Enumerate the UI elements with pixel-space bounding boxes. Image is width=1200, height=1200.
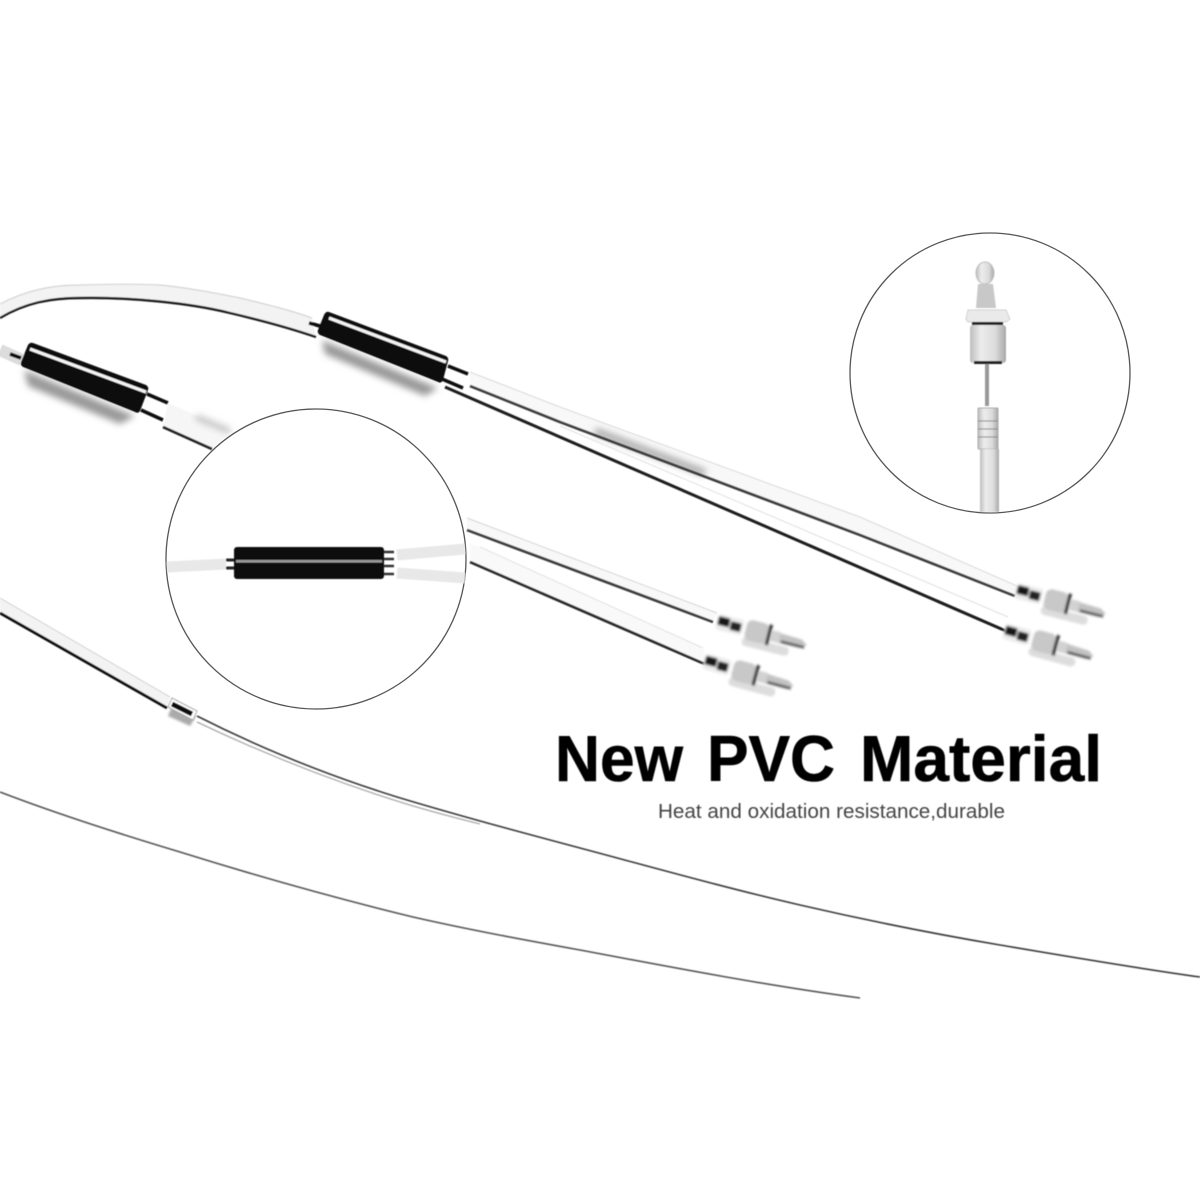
cable set: lower cable and wires	[0, 598, 1200, 998]
black washer	[972, 322, 1003, 325]
lower housing	[0, 598, 170, 708]
upper housing curve	[0, 284, 316, 337]
nut flange	[966, 310, 1010, 322]
bottom wire	[0, 792, 860, 998]
inner wire shadow line	[197, 722, 480, 824]
thin cable left	[167, 564, 226, 567]
heading	[555, 722, 1102, 795]
twin cables right	[397, 549, 465, 578]
upper long cable 1	[470, 372, 1017, 596]
mid cable 1	[467, 518, 717, 622]
cable set: second pair	[0, 343, 809, 702]
connector pins left	[226, 560, 234, 568]
connector pins right	[384, 552, 394, 574]
left black sleeve shadow	[24, 370, 135, 424]
left black sleeve	[10, 343, 168, 420]
heading: PVC	[707, 722, 835, 795]
sleeve highlight	[236, 560, 382, 563]
lower crimp	[168, 698, 197, 726]
upper black sleeve shadow	[322, 340, 438, 396]
thread	[976, 284, 996, 308]
housing	[980, 449, 999, 512]
black sleeve	[234, 547, 384, 579]
ball tip	[976, 262, 994, 284]
fitting: middle lower	[700, 651, 796, 702]
barrel base	[974, 361, 1002, 364]
subheading: Heat and oxidation resistance,durable	[658, 801, 1005, 823]
fitting: middle upper	[713, 612, 809, 660]
inner wire	[985, 364, 989, 406]
heading: New	[555, 722, 683, 795]
upper long cable 2	[445, 387, 1008, 631]
zoom circle: fitting detail	[850, 233, 1130, 513]
fitting: top right upper	[1012, 581, 1108, 629]
fitting: top right lower	[1000, 621, 1096, 672]
upper black sleeve	[309, 312, 468, 388]
cables into circle	[163, 403, 232, 449]
zoom circle: left sleeve detail	[166, 409, 466, 709]
crimp ferrule	[978, 408, 998, 449]
left stub	[0, 350, 22, 360]
cable set: top pair	[0, 284, 1108, 672]
heading: Material	[860, 722, 1102, 795]
mid cable 2	[470, 543, 707, 665]
knurled barrel	[970, 325, 1006, 363]
inner wire long	[197, 716, 1200, 977]
